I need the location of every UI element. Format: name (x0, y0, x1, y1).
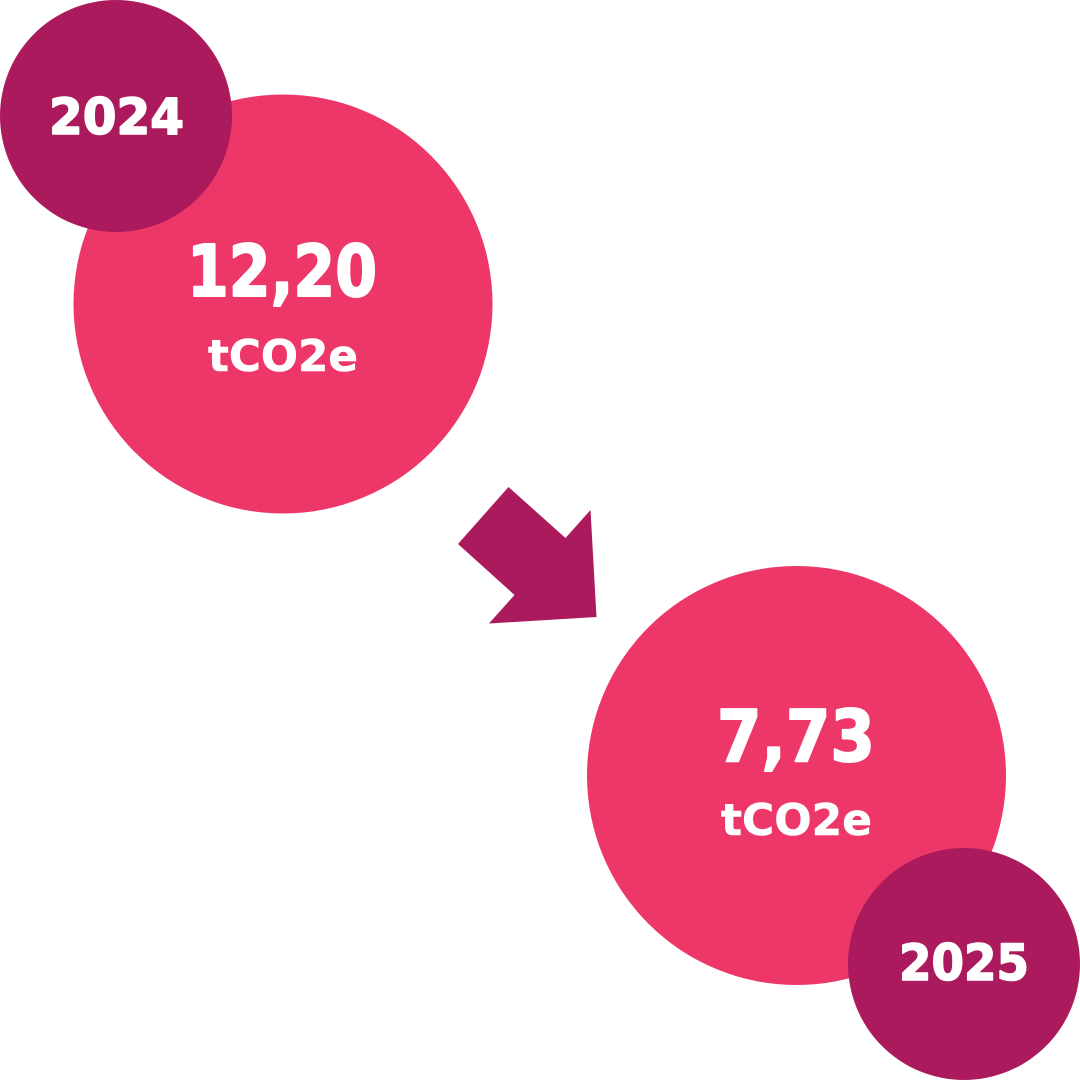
value: 7,73: 7,73 (717, 695, 875, 778)
panel: 2024 value circle (74, 94, 492, 514)
badge: 2025 (848, 848, 1080, 1080)
value: 12,20: 12,20 (187, 230, 377, 313)
unit: tCO2e 2024: tCO2e (208, 331, 358, 382)
badge: 2024: 2024 (49, 88, 184, 146)
unit: tCO2e 2025: tCO2e (721, 795, 872, 846)
badge: 2025: 2025 (899, 934, 1029, 992)
panel: 2025 value circle (587, 566, 1006, 985)
badge: 2024 (0, 0, 232, 232)
arrow: decrease from 2024 to 2025 (458, 487, 596, 624)
